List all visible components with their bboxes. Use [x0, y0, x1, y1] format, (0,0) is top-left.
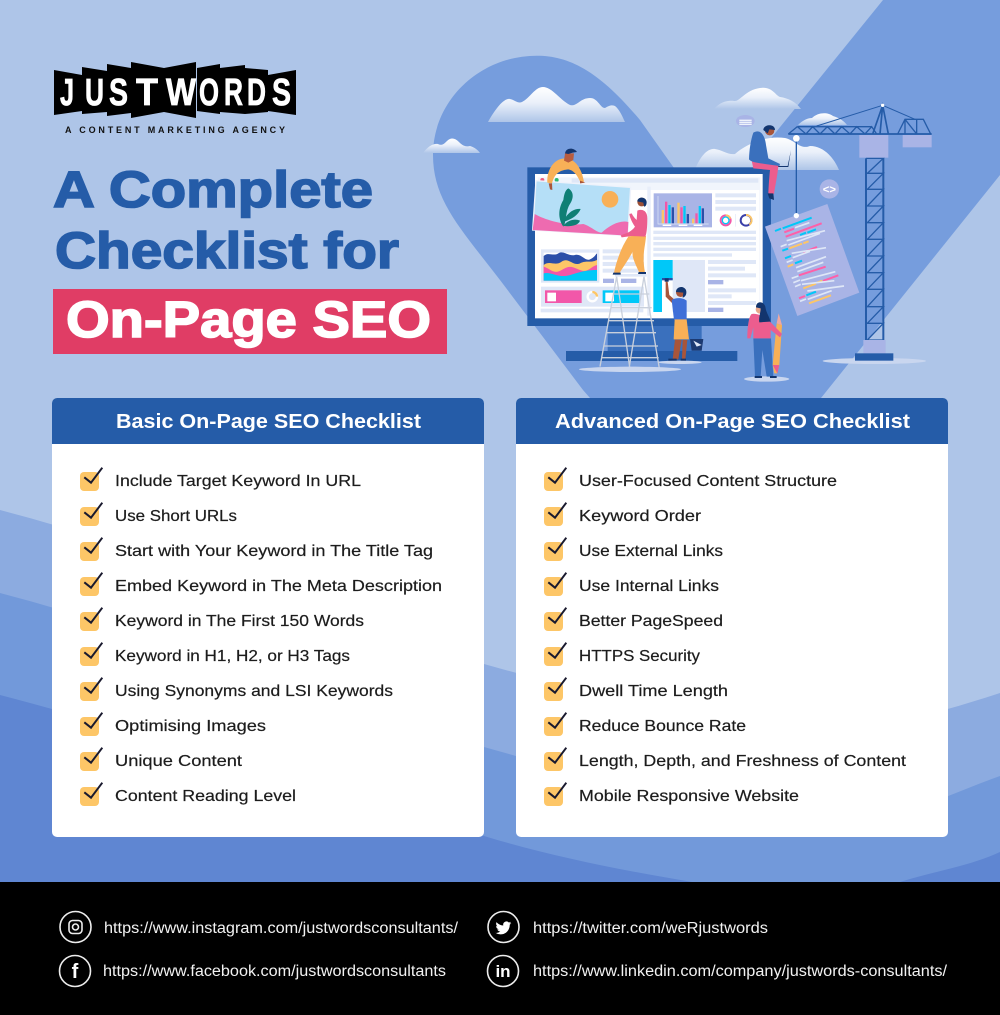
basic checklist items: Using Synonyms and LSI Keywords — [115, 683, 393, 700]
advanced checklist items: Length, Depth, and Freshness of Content — [579, 753, 907, 770]
footer — [0, 882, 1000, 1015]
screen buttons — [603, 279, 723, 312]
advanced checklist items: Dwell Time Length — [579, 683, 728, 700]
basic checklist items: Embed Keyword in The Meta Description — [115, 578, 442, 595]
woman with pencil — [744, 302, 789, 382]
advanced checklist items: User-Focused Content Structure — [579, 473, 837, 490]
paint bucket — [690, 339, 703, 351]
bottom cards — [545, 290, 639, 303]
footer links: https://twitter.com/weRjustwords — [533, 920, 768, 937]
icon: twitter — [488, 912, 519, 942]
area chart — [544, 252, 597, 281]
code badge: <> — [823, 184, 836, 196]
title: A Complete — [53, 161, 373, 218]
basic heading: Basic On-Page SEO Checklist — [116, 411, 421, 433]
donut charts — [721, 214, 752, 227]
icon: linkedin — [488, 956, 518, 986]
basic checklist items: Optimising Images — [115, 718, 266, 735]
icon: facebook: f — [72, 961, 79, 983]
advanced checklist items — [579, 473, 907, 805]
advanced checklist items: Use Internal Links — [579, 578, 719, 595]
basic checklist items: Include Target Keyword In URL — [115, 473, 361, 490]
logo: A CONTENT MARKETING AGENCY — [65, 125, 285, 135]
advanced heading: Advanced On-Page SEO Checklist — [555, 411, 910, 433]
person holding picture from above — [547, 149, 585, 190]
man with laptop — [749, 125, 791, 200]
ground shadows — [579, 361, 702, 372]
logo: J — [60, 72, 74, 114]
logo: T — [136, 72, 158, 114]
footer links: https://www.linkedin.com/company/justwords-consultants/ — [533, 963, 948, 980]
logo: D — [247, 72, 266, 114]
basic checklist items: Keyword in The First 150 Words — [115, 613, 364, 630]
footer links — [103, 920, 948, 980]
title: Checklist for — [55, 222, 399, 279]
logo: S — [272, 72, 291, 114]
crane — [788, 104, 932, 364]
advanced checklist items: Keyword Order — [579, 508, 702, 525]
code badge — [820, 179, 839, 199]
ladder — [600, 274, 659, 369]
footer links: https://www.instagram.com/justwordsconsultants/ — [104, 920, 459, 937]
clouds — [423, 87, 847, 170]
panel: advanced checklist — [516, 398, 948, 837]
basic checklist items: Use Short URLs — [115, 508, 237, 525]
advanced checklist items: Reduce Bounce Rate — [579, 718, 746, 735]
title — [53, 161, 447, 354]
icon: linkedin: in — [495, 962, 511, 981]
person on ladder — [613, 198, 647, 275]
logo: O — [199, 72, 219, 114]
text lines on screen — [541, 193, 756, 312]
footer links: https://www.facebook.com/justwordsconsultants — [103, 963, 446, 980]
painter — [665, 278, 689, 361]
icon: instagram — [60, 912, 91, 942]
logo: R — [224, 72, 243, 114]
title: On-Page SEO — [66, 291, 431, 348]
basic checklist items: Start with Your Keyword in The Title Tag — [115, 543, 433, 560]
advanced checkboxes — [544, 468, 566, 806]
basic checklist items: Keyword in H1, H2, or H3 Tags — [115, 648, 350, 665]
basic checklist items: Content Reading Level — [115, 788, 296, 805]
logo — [54, 62, 296, 135]
monitor — [527, 167, 771, 361]
speech bubble — [736, 115, 755, 127]
basic checklist items: Unique Content — [115, 753, 243, 770]
advanced checklist items: Better PageSpeed — [579, 613, 723, 630]
bar chart on screen — [654, 193, 712, 227]
basic checklist items — [115, 473, 442, 805]
panel: basic checklist — [52, 398, 484, 837]
paint roller stripe — [653, 260, 673, 312]
advanced checklist items: Use External Links — [579, 543, 723, 560]
logo: W — [166, 72, 196, 114]
icon: facebook — [60, 956, 90, 986]
logo: U — [85, 72, 104, 114]
advanced checklist items: HTTPS Security — [579, 648, 700, 665]
advanced checklist items: Mobile Responsive Website — [579, 788, 799, 805]
basic checkboxes — [80, 468, 102, 806]
illustration: website under construction — [527, 104, 932, 382]
logo: S — [109, 72, 128, 114]
hanging code sheet — [765, 135, 859, 316]
picture card — [533, 181, 631, 236]
